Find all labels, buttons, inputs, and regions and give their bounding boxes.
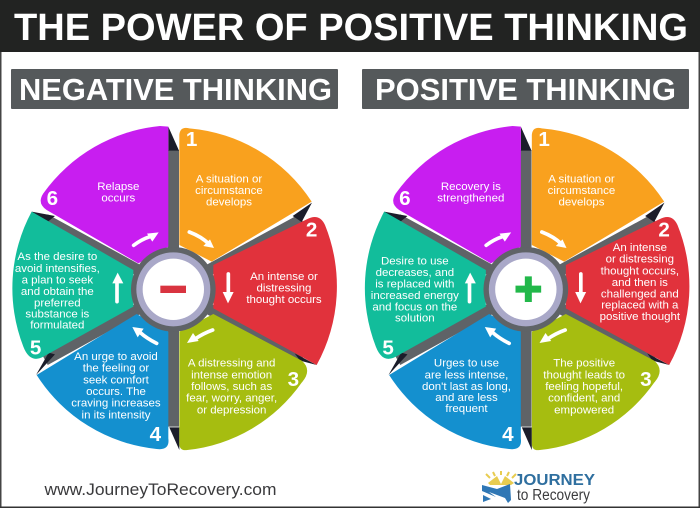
segment 2: red: and then is — [612, 277, 668, 289]
segment 5: teal: decreases, and — [376, 267, 454, 279]
segment 1: orange: A situation or — [548, 173, 615, 185]
segment 3: green: follows, such as — [191, 381, 272, 393]
segment 6: purple — [393, 126, 521, 263]
segment 1: orange: circumstance — [195, 185, 263, 197]
segment 1: orange — [179, 128, 312, 262]
panel: positive thinking wheel — [365, 126, 689, 450]
segment 3: green: empowered — [554, 404, 614, 416]
segment 6: purple: 6 — [47, 187, 58, 210]
panel: negative thinking wheel — [12, 126, 337, 450]
segment 5: teal: is replaced with — [375, 279, 454, 291]
segment 5: teal — [365, 212, 486, 359]
segment 6: purple: Relapse — [97, 181, 139, 193]
segment 3: green: 3 — [640, 368, 652, 391]
segment 1: orange: 1 — [186, 128, 197, 151]
title: THE POWER OF POSITIVE THINKING — [14, 7, 688, 49]
segment 2: red: An intense — [613, 242, 667, 254]
segment 5: teal: a plan to seek — [22, 274, 93, 286]
segment 2: red: thought occurs, — [601, 265, 679, 277]
segment 2: red: 2 — [658, 219, 670, 242]
segment 3: green — [179, 314, 307, 450]
segment 5: teal: solution — [395, 312, 435, 324]
segment 4: blue — [37, 314, 169, 449]
segment 2: red: thought occurs — [246, 294, 322, 306]
segment 5: teal: substance is — [25, 309, 90, 321]
segment 2: red: distressing — [257, 283, 311, 295]
segment 4: blue: frequent — [445, 403, 488, 415]
segment 5: teal: and focus on the — [372, 301, 457, 313]
segment 5: teal: and obtain the — [21, 286, 94, 298]
segment 4: blue: and are less — [435, 392, 498, 404]
segment 5: teal — [12, 212, 133, 359]
segment 2: red: An intense or — [250, 271, 318, 283]
segment 6: purple: Recovery is — [441, 181, 501, 193]
segment 2: red: positive thought — [600, 311, 681, 323]
segment 4: blue: the feeling or — [83, 363, 149, 375]
segment 5: teal: Desire to use — [381, 255, 449, 267]
segment 2: red: or distressing — [606, 254, 674, 266]
segment 5: teal: 5 — [30, 336, 41, 359]
segment 5: teal: avoid intensifies, — [15, 263, 100, 275]
logo: JOURNEY — [514, 472, 595, 489]
segment 1: orange: circumstance — [548, 185, 615, 197]
segment 1: orange: develops — [559, 196, 605, 208]
logo: to Recovery — [517, 487, 590, 504]
segment 5: teal: increased energy — [371, 290, 459, 302]
segment 4: blue: An urge to avoid — [74, 351, 158, 363]
segment 6: purple: 6 — [399, 187, 411, 210]
segment 2: red — [213, 217, 337, 365]
segment 4: blue: don't last as long, — [422, 381, 511, 393]
segment 3: green: or depression — [197, 404, 266, 416]
segment 4: blue: 4 — [150, 423, 162, 446]
segment 4: blue: Urges to use — [434, 358, 499, 370]
segment 3: green — [532, 314, 660, 450]
segment 3: green: intense emotion — [191, 369, 272, 381]
segment 2: red: replaced with a — [601, 300, 679, 312]
segment 6: purple — [41, 126, 168, 263]
website url: www.JourneyToRecovery.com — [43, 481, 277, 499]
segment 1: orange: 1 — [538, 128, 550, 151]
segment 4: blue: occurs. The — [86, 386, 146, 398]
icon: sun and road — [482, 471, 516, 503]
center minus icon — [131, 247, 216, 332]
segment 5: teal: formulated — [30, 320, 84, 332]
segment 6: purple: strengthened — [437, 192, 504, 204]
logo — [482, 471, 595, 504]
segment 2: red — [566, 217, 689, 365]
segment 3: green: confident, and — [548, 393, 620, 405]
segment 5: teal: 5 — [382, 336, 394, 359]
segment 1: orange — [532, 128, 664, 262]
segment 4: blue: in its intensity — [82, 409, 151, 421]
segment 3: green: A distressing and — [188, 358, 275, 370]
segment 4: blue — [389, 314, 521, 449]
segment 4: blue: are less intense, — [425, 369, 508, 381]
segment 3: green: thought leads to — [543, 369, 625, 381]
segment 5: teal: As the desire to — [17, 251, 97, 263]
segment 3: green: The positive — [553, 358, 615, 370]
segment 6: purple: occurs — [101, 192, 136, 204]
center plus icon — [483, 247, 568, 332]
heading: positive thinking: POSITIVE THINKING — [375, 72, 676, 107]
segment 5: teal: preferred — [34, 298, 81, 310]
segment 3: green: feeling hopeful, — [545, 381, 623, 393]
segment 4: blue: craving increases — [71, 398, 161, 410]
heading: negative thinking: NEGATIVE THINKING — [19, 72, 332, 107]
segment 2: red: challenged and — [601, 288, 679, 300]
segment 3: green: 3 — [288, 368, 299, 391]
segment 1: orange: A situation or — [196, 173, 262, 185]
segment 4: blue: 4 — [502, 423, 514, 446]
segment 2: red: 2 — [306, 219, 317, 242]
segment 1: orange: develops — [206, 196, 252, 208]
segment 4: blue: seek comfort — [83, 374, 150, 386]
segment 3: green: fear, worry, anger, — [186, 393, 277, 405]
